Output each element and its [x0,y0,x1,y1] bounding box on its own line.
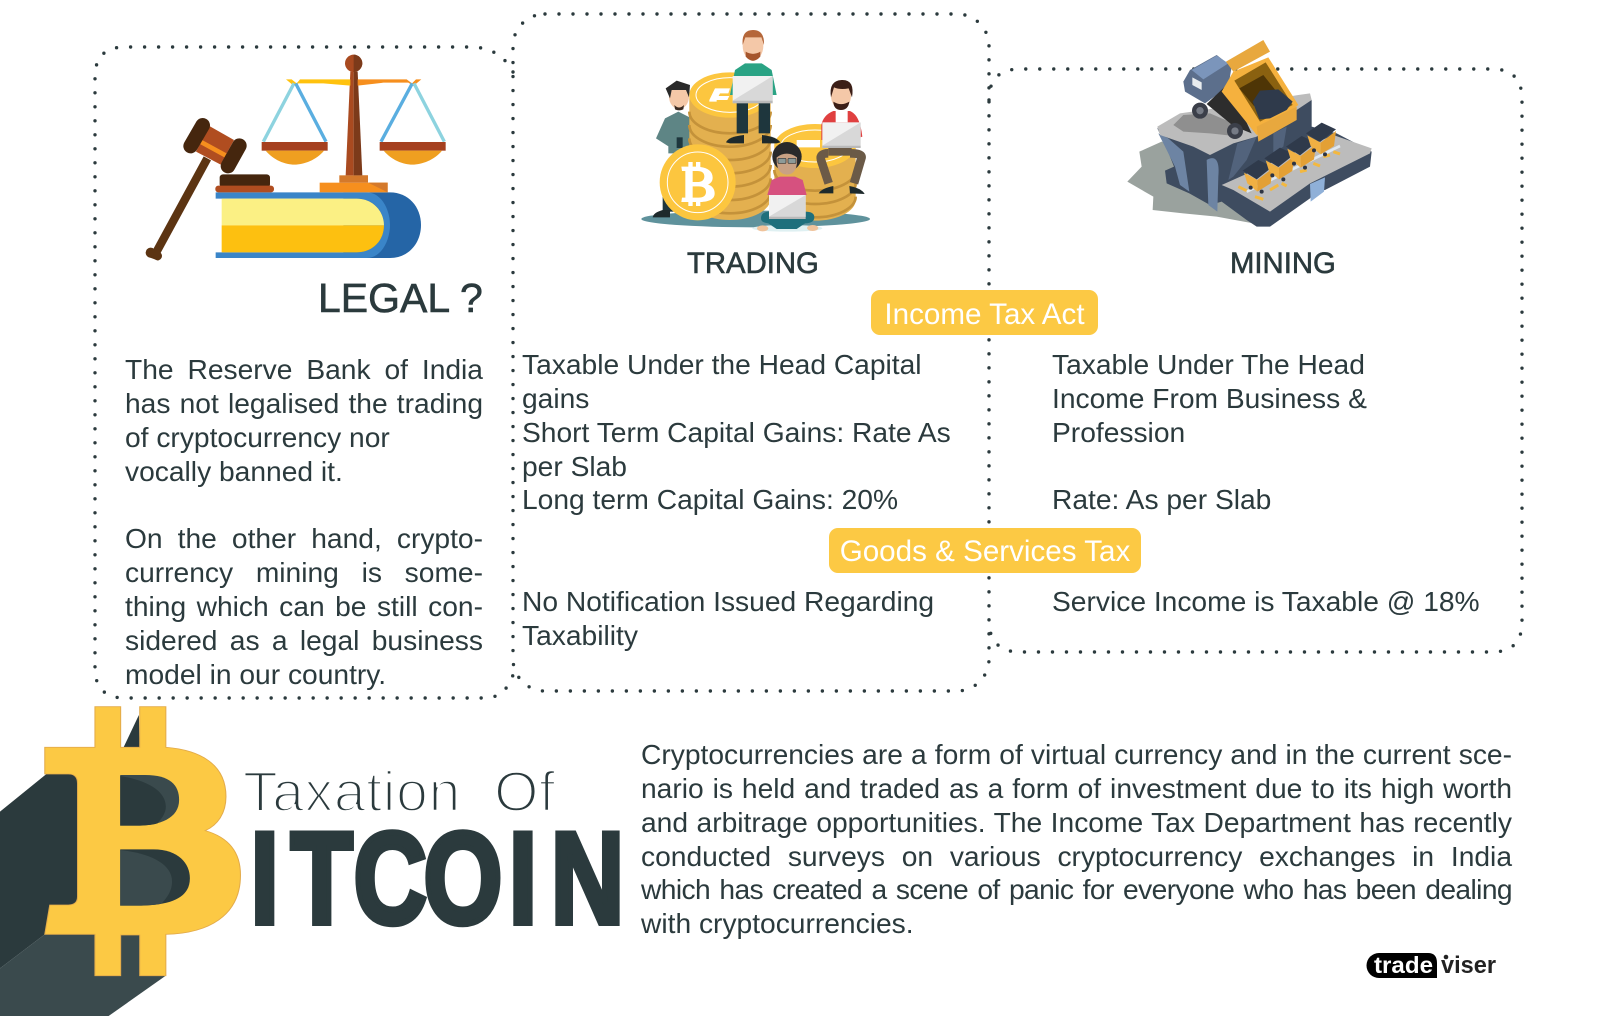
mine cart 2 [1264,148,1294,181]
heading: trading: TRADING [687,247,819,280]
text block: legal status: On the other hand, crypto- [125,522,483,554]
person: right trader [819,80,865,194]
text block: mining income tax: Income From Business & [1052,382,1367,414]
text block: legal status: model in our country. [125,658,386,690]
panel outline: legal [95,47,513,698]
coin stack: small [774,124,856,221]
logo: tradeviser [1366,952,1496,979]
text block: trading gst: No Notification Issued Regarding [522,585,934,617]
text block: trading gst: Taxability [522,619,638,651]
logo: tradeviser: trade [1374,952,1433,978]
text block: mining income tax: Taxable Under The Head [1052,348,1365,380]
text block: trading income tax [522,348,951,515]
person: left trader [653,81,692,217]
text block: legal status: has not legalised the trading [125,387,483,419]
text block: introduction: which has created a scene of panic for everyone who has been dealing [641,873,1512,905]
text block: introduction: nario is held and traded as a form of investment due to its high worth [641,772,1512,804]
person: top trader [726,30,780,143]
text block: legal status: thing which can be still con- [125,590,483,622]
heading: legal: LEGAL ? [318,275,483,321]
text block: trading income tax: Short Term Capital Gains: Rate As [522,416,951,448]
mine cart 3 [1286,136,1316,170]
text block: introduction [641,738,1512,939]
text block: legal status: sidered as a legal business [125,624,483,656]
callout: income tax act: Income Tax Act [884,298,1085,331]
mine cart 1 [1243,160,1273,194]
text block: mining income tax [1052,348,1367,515]
rock plateau [1157,100,1372,227]
logo: bitcoin symbol with long shadow [0,707,240,1016]
truck [1183,55,1232,103]
title: ITCOIN: ITCOIN [251,805,624,951]
text block: mining income tax: Rate: As per Slab [1052,483,1271,515]
text block: trading income tax: Long term Capital Gains: 20% [522,483,898,515]
text block: introduction: with cryptocurrencies. [641,907,914,939]
coin stack: large [689,72,771,220]
lower platform [1222,135,1372,212]
text block: introduction: Cryptocurrencies are a form of virtual currency and in the current sce- [641,738,1512,770]
callout: goods and services tax [829,528,1141,573]
text block: trading income tax: Taxable Under the Head Capital [522,348,922,380]
person: seated woman [752,142,822,232]
logo: tradeviser: viser [1441,952,1496,979]
panel outline: trading [513,14,989,691]
text block: legal status: vocally banned it. [125,455,343,487]
text block: legal status [125,353,483,690]
text block: trading income tax: gains [522,382,589,414]
callout: goods and services tax: Goods & Services Tax [840,535,1130,568]
callout: income tax act [871,290,1098,335]
text block: trading gst [522,585,934,651]
text block: legal status: of cryptocurrency nor [125,421,390,453]
text block: introduction: and arbitrage opportunities. The Income Tax Department has recently [641,806,1512,838]
icon: coal mine with dump truck [1127,40,1372,227]
text block: trading income tax: per Slab [522,450,627,482]
icon: front bitcoin coin [660,144,736,220]
heading: mining: MINING [1230,247,1336,280]
title: Taxation Of: Taxation Of [243,760,555,824]
text block: mining gst: Service Income is Taxable @ 18% [1052,585,1480,617]
text block: legal status: currency mining is some- [125,556,483,588]
icon: gavel, scales and law book [146,55,446,261]
text block: introduction: conducted surveys on various cryptocurrency exchanges in India [641,840,1512,872]
text block: mining income tax: Profession [1052,416,1185,448]
icon: traders on bitcoin stacks [641,30,870,232]
text block: legal status: The Reserve Bank of India [125,353,483,385]
panel outline: mining [989,69,1522,652]
mine cart 4 [1306,123,1336,156]
